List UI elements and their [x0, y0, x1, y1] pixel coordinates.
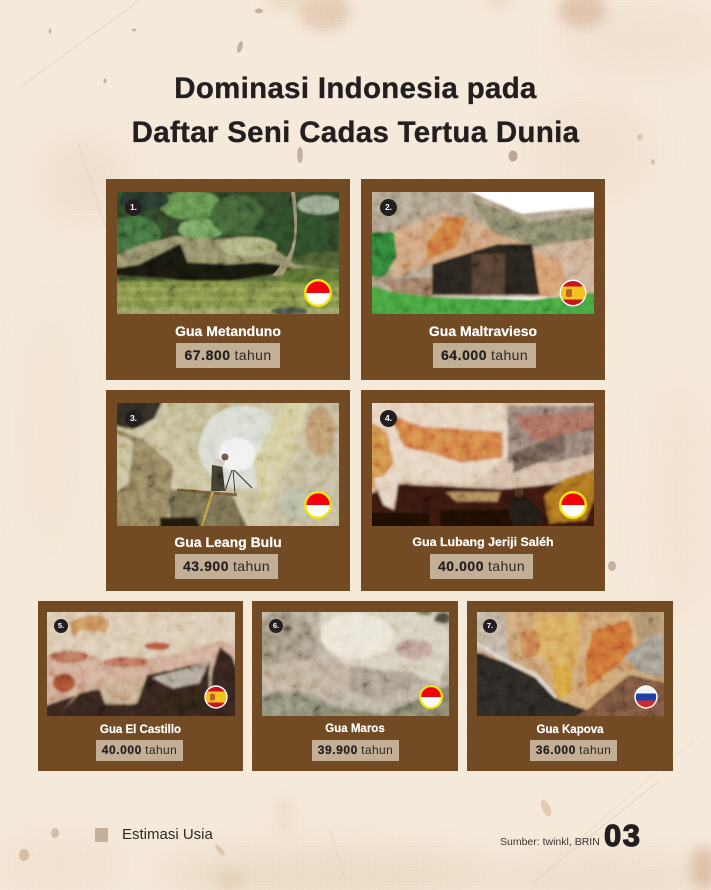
age pill: 40.000 tahun [438, 558, 525, 574]
panel: Gua Lubang Jeriji Saléh [361, 390, 605, 591]
panel: Gua Maltravieso [361, 179, 605, 380]
age pill [530, 740, 617, 761]
age pill: 40.000 tahun [102, 743, 177, 757]
age pill [176, 343, 280, 368]
photo: mottled limestone wall [262, 612, 449, 716]
title [132, 72, 580, 149]
cave name: Gua Kapova [536, 724, 604, 736]
photo: limestone cave with researcher [117, 403, 452, 526]
legend: estimated age [95, 826, 213, 843]
number badge [125, 199, 142, 216]
cave name: Gua El Castillo [100, 724, 181, 736]
age pill: 39.900 tahun [318, 743, 393, 757]
flag: Spain [204, 685, 228, 709]
flag: Russia [634, 685, 658, 709]
legend swatch [95, 828, 108, 842]
number badge: 4. [385, 413, 392, 423]
number badge: 7. [487, 621, 493, 630]
age pill [433, 343, 536, 368]
title: Dominasi Indonesia pada [174, 72, 537, 105]
number badge [380, 410, 397, 427]
age pill: 43.900 tahun [183, 558, 270, 574]
flag: Indonesia [559, 491, 587, 519]
title: Daftar Seni Cadas Tertua Dunia [132, 116, 579, 149]
flag: Indonesia [304, 491, 332, 519]
photo: painted cave ceiling with silhouette [372, 403, 594, 526]
number badge: 1. [130, 202, 137, 212]
age pill [96, 740, 183, 761]
age pill [175, 554, 278, 579]
number badge: 5. [58, 621, 64, 630]
age pill [312, 740, 399, 761]
flag: Indonesia [304, 279, 332, 307]
number badge [483, 619, 497, 633]
cave name: Gua Leang Bulu [174, 534, 282, 550]
age pill: 67.800 tahun [184, 347, 272, 363]
page number: 03 [604, 818, 641, 853]
panel: Gua El Castillo [38, 601, 243, 771]
panel: Gua Leang Bulu [106, 390, 350, 591]
photo: ochre cave wall with paintings [477, 612, 664, 716]
age pill [430, 554, 533, 579]
age pill: 64.000 tahun [441, 347, 528, 363]
age pill: 36.000 tahun [536, 743, 611, 757]
photo: red paintings on cave ceiling [47, 486, 576, 716]
cave name: Gua Maros [325, 723, 385, 735]
panel: Gua Maros [252, 601, 458, 771]
number badge [380, 199, 397, 216]
source note: Sumber: twinkl, BRIN [500, 836, 600, 848]
legend label: Estimasi Usia [122, 826, 213, 843]
number badge: 3. [130, 413, 137, 423]
flag: Indonesia [419, 685, 443, 709]
number badge [125, 410, 142, 427]
flag: Spain [560, 280, 586, 306]
panel: Gua Metanduno [106, 179, 350, 380]
cave name: Gua Lubang Jeriji Saléh [412, 535, 554, 549]
panel: Gua Kapova [467, 601, 673, 771]
cave name: Gua Maltravieso [429, 323, 537, 339]
number badge: 2. [385, 202, 392, 212]
photo: cave with green foliage [117, 192, 339, 314]
number badge [269, 619, 283, 633]
photo: rock cliff with gated cave [372, 192, 594, 314]
number badge: 6. [273, 621, 279, 630]
number badge [54, 619, 68, 633]
cave name: Gua Metanduno [175, 323, 281, 339]
